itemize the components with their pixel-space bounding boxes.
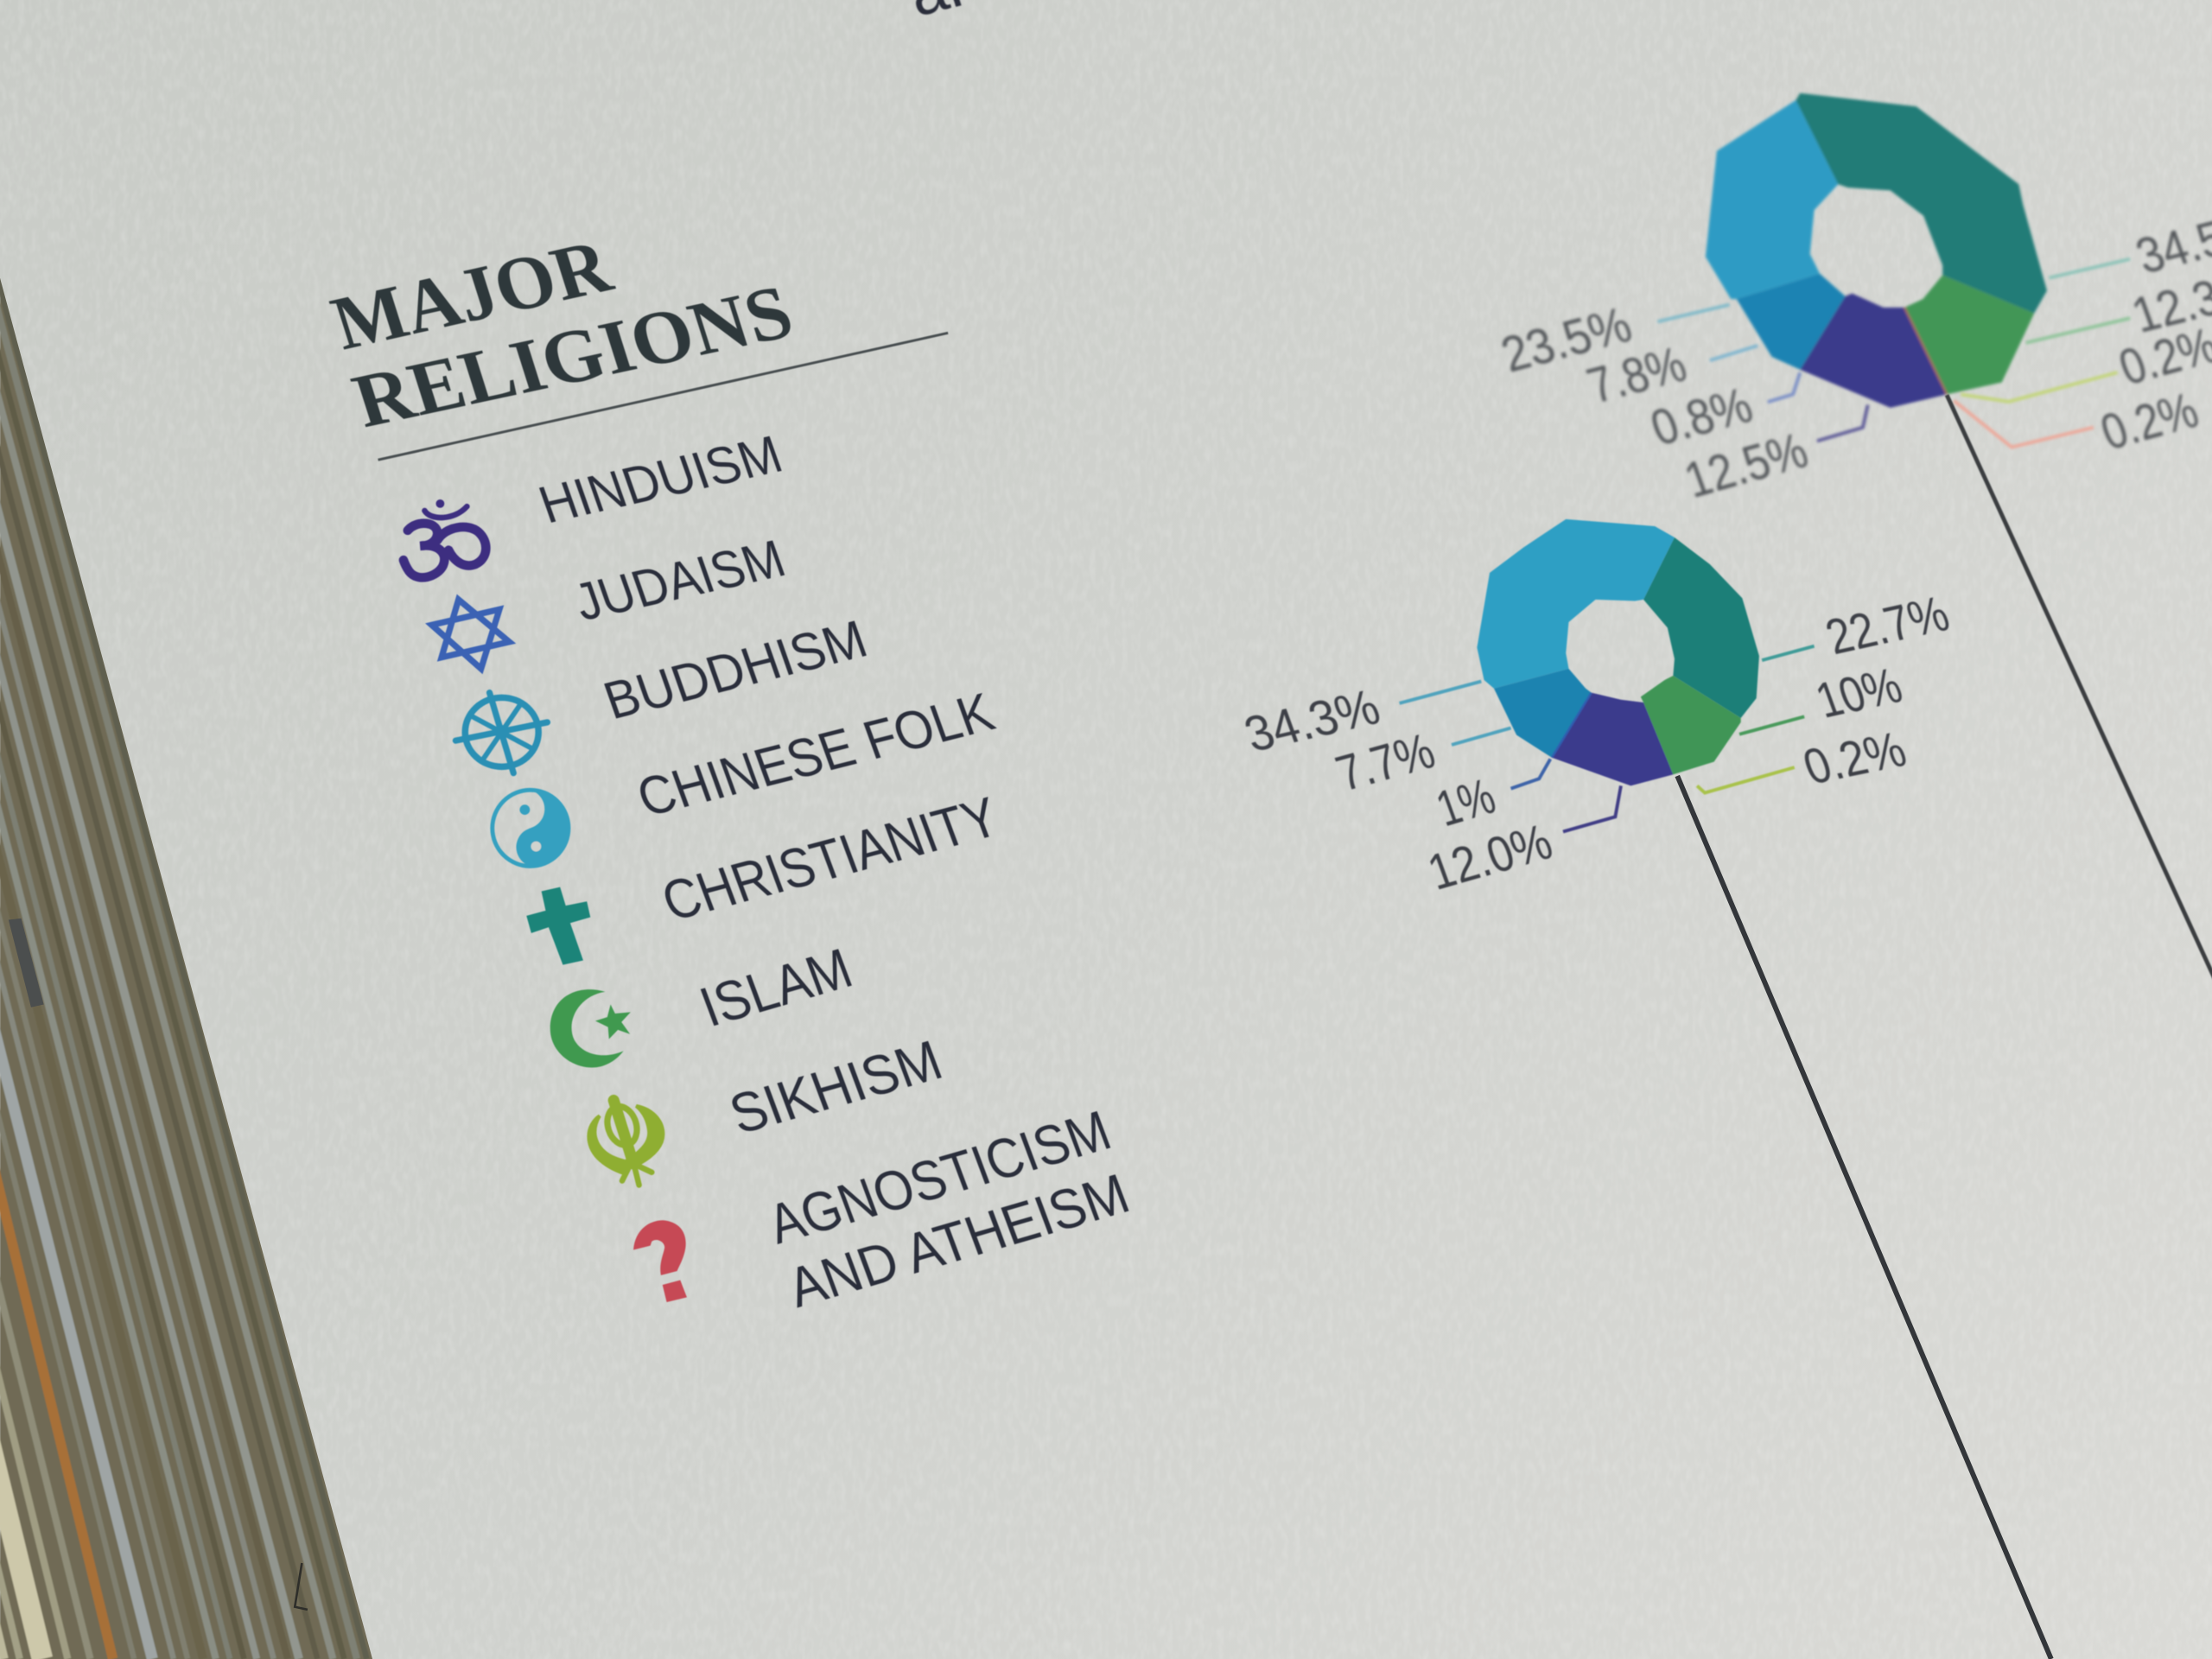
upper percentage labels: 23.5% [1494,297,1639,383]
segment: agnosticism 0.2% [1904,308,1947,394]
icon: question mark [633,1220,687,1302]
label: chinese folk: CHINESE FOLK [629,682,1001,828]
upper percentage labels: 0.8% [1643,378,1759,456]
label: islam: ISLAM [692,937,860,1039]
label: agnosticism and atheism [760,1099,1137,1319]
segment: christianity 34.5% [1796,93,2047,313]
leader lines [1657,259,2130,448]
segment: chinese folk 23.5% [1706,100,1838,299]
segment: buddhism 7.7% [1494,669,1592,758]
segment: hinduism 12.0% [1552,693,1673,785]
lower percentage labels: 22.7% [1819,587,1956,665]
icon: dharma wheel [455,693,547,773]
heading underline [378,333,948,460]
donut chart: lower [1237,519,1956,900]
lower percentage labels: 7.7% [1329,723,1442,802]
legend heading: MAJOR [322,224,621,366]
paper grain [10,6,966,776]
icon: crescent and star [550,989,631,1068]
label: christianity: CHRISTIANITY [654,785,1007,932]
timeline stem: upper donut [1947,395,2212,979]
label: agnosticism and atheism: AND ATHEISM [779,1162,1137,1319]
lower percentage labels: 12.0% [1421,814,1560,900]
dark tab on page edge [9,918,44,1007]
segment: hinduism 12.5% [1800,294,1947,408]
icon: khanda [588,1100,663,1185]
label: sikhism: SIKHISM [721,1028,950,1146]
upper percentage labels [1494,201,2212,509]
segment: judaism 1% [1552,693,1592,758]
label: judaism: JUDAISM [567,530,792,632]
icon: star of david [432,600,509,669]
lower percentage labels: 1% [1429,768,1503,837]
legend heading: RELIGIONS [343,270,803,444]
label: hinduism: HINDUISM [531,425,790,535]
page edges of the book [0,268,395,1659]
timeline stem: lower donut [1677,776,2051,1659]
icon: cross [526,887,590,965]
segment: buddhism 7.8% [1737,274,1846,370]
lower percentage labels: 10% [1808,658,1910,728]
leader lines [1400,646,1815,831]
segment: islam 12.3% [1904,275,2034,394]
icon: yin yang [493,788,570,867]
donut chart: upper [1494,93,2212,509]
lower percentage labels: 0.2% [1796,722,1913,795]
icon: om [404,499,486,577]
small printed mark on page edge [295,1563,308,1610]
lower percentage labels [1237,587,1956,900]
label: agnosticism and atheism: AGNOSTICISM [760,1099,1119,1255]
lower percentage labels: 34.3% [1237,679,1387,762]
segment: chinese folk 34.3% [1477,519,1675,689]
legend: major religions [322,224,1137,1319]
segment: christianity 22.7% [1643,537,1759,718]
label: buddhism: BUDDHISM [596,610,874,731]
upper percentage labels: 12.5% [1678,423,1815,509]
segment: islam 10% [1641,676,1741,774]
upper percentage labels: 7.8% [1580,337,1694,414]
